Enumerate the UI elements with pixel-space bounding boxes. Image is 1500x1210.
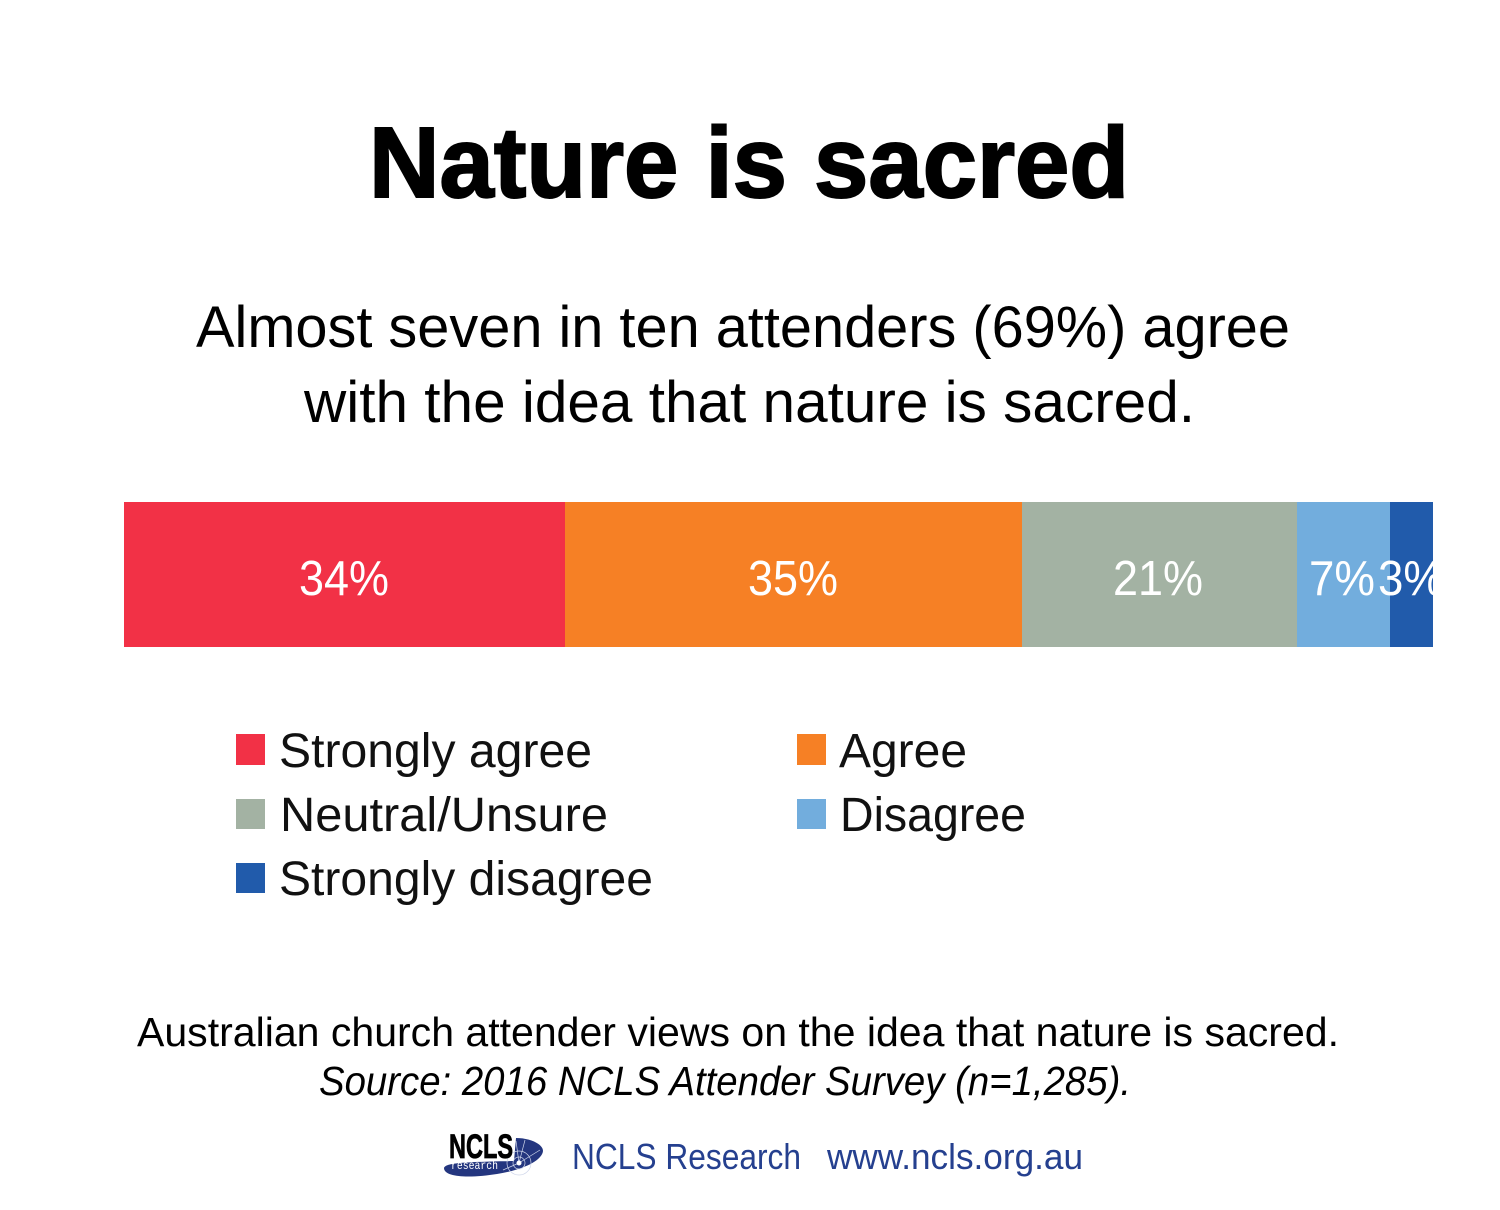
segment: agree 35%: 35% xyxy=(748,552,838,606)
legend item: strongly disagree: Strongly disagree xyxy=(279,853,653,906)
legend item: disagree: Disagree xyxy=(840,789,1026,842)
segment: disagree 7% xyxy=(1297,502,1390,647)
legend item: agree: Agree xyxy=(839,725,967,778)
stacked bar chart xyxy=(124,502,1444,647)
legend item: neutral/unsure: Neutral/Unsure xyxy=(280,789,608,842)
source note: Source: 2016 NCLS Attender Survey (n=1,285). xyxy=(319,1058,1131,1104)
organisation name: NCLS Research xyxy=(572,1136,801,1177)
label: 7%: 7% xyxy=(1309,552,1375,606)
title: Nature is sacred xyxy=(369,107,1129,219)
segment: strongly agree 34%: 34% xyxy=(299,552,389,606)
subtitle: with the idea that nature is sacred. xyxy=(303,370,1195,435)
legend item: strongly agree: Strongly agree xyxy=(279,725,592,778)
segment: strongly agree 34% xyxy=(124,502,565,647)
subtitle xyxy=(196,295,1290,435)
legend xyxy=(236,725,1026,906)
segment: agree 35% xyxy=(565,502,1022,647)
segment: neutral/unsure 21%: 21% xyxy=(1113,552,1203,606)
segment: neutral/unsure 21% xyxy=(1022,502,1297,647)
website: www.ncls.org.au xyxy=(826,1136,1083,1177)
subtitle: Almost seven in ten attenders (69%) agree xyxy=(196,295,1290,360)
icon: NCLS research logo: NCLS xyxy=(449,1128,513,1166)
caption: Australian church attender views on the idea that nature is sacred. xyxy=(137,1009,1339,1055)
label: 3%: 3% xyxy=(1378,552,1444,606)
segment: strongly disagree 3% xyxy=(1390,502,1433,647)
icon: NCLS research logo: research xyxy=(451,1159,498,1173)
